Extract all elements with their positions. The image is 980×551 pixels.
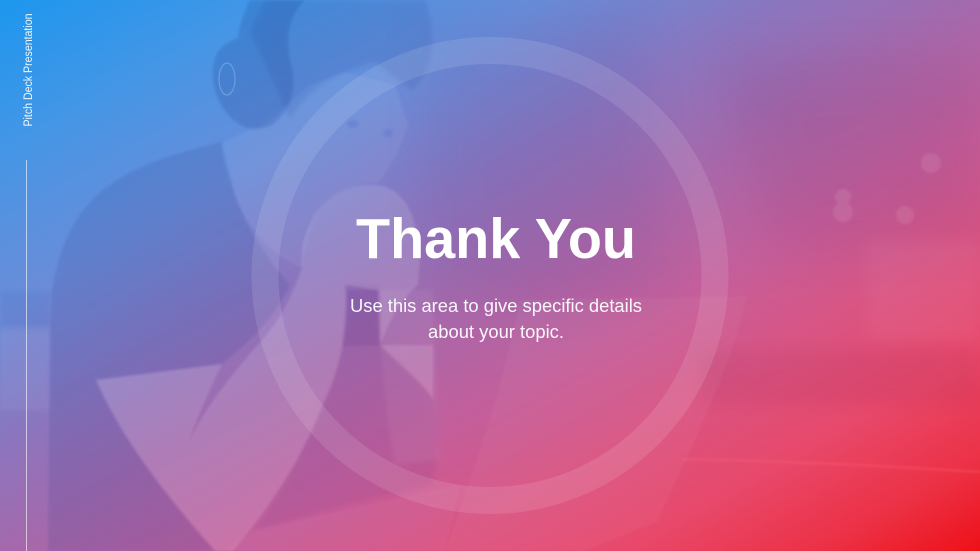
photo: eyes — [347, 120, 393, 137]
subtitle — [350, 296, 642, 342]
subtitle: Use this area to give specific details — [350, 296, 642, 316]
photo: laptop — [445, 296, 747, 551]
photo: shirt lower torso — [255, 285, 438, 530]
photo: clasped hands — [302, 185, 433, 400]
photo: neck and face — [222, 72, 408, 268]
photo: arm and sleeve end — [96, 268, 346, 551]
vertical line — [26, 160, 27, 551]
bokeh lights — [833, 153, 941, 224]
photo: right forearm — [380, 290, 440, 465]
photo: person shirt — [48, 142, 290, 551]
photo: headphones — [213, 0, 305, 129]
photo: laptop base — [225, 485, 460, 551]
vertical label: Pitch Deck Presentation — [23, 14, 35, 126]
subtitle: about your topic. — [428, 322, 564, 342]
ring — [265, 50, 715, 500]
photo: hair — [250, 0, 432, 118]
title: Thank You — [356, 207, 636, 271]
photo: shirt gap beside forearm — [342, 290, 380, 346]
